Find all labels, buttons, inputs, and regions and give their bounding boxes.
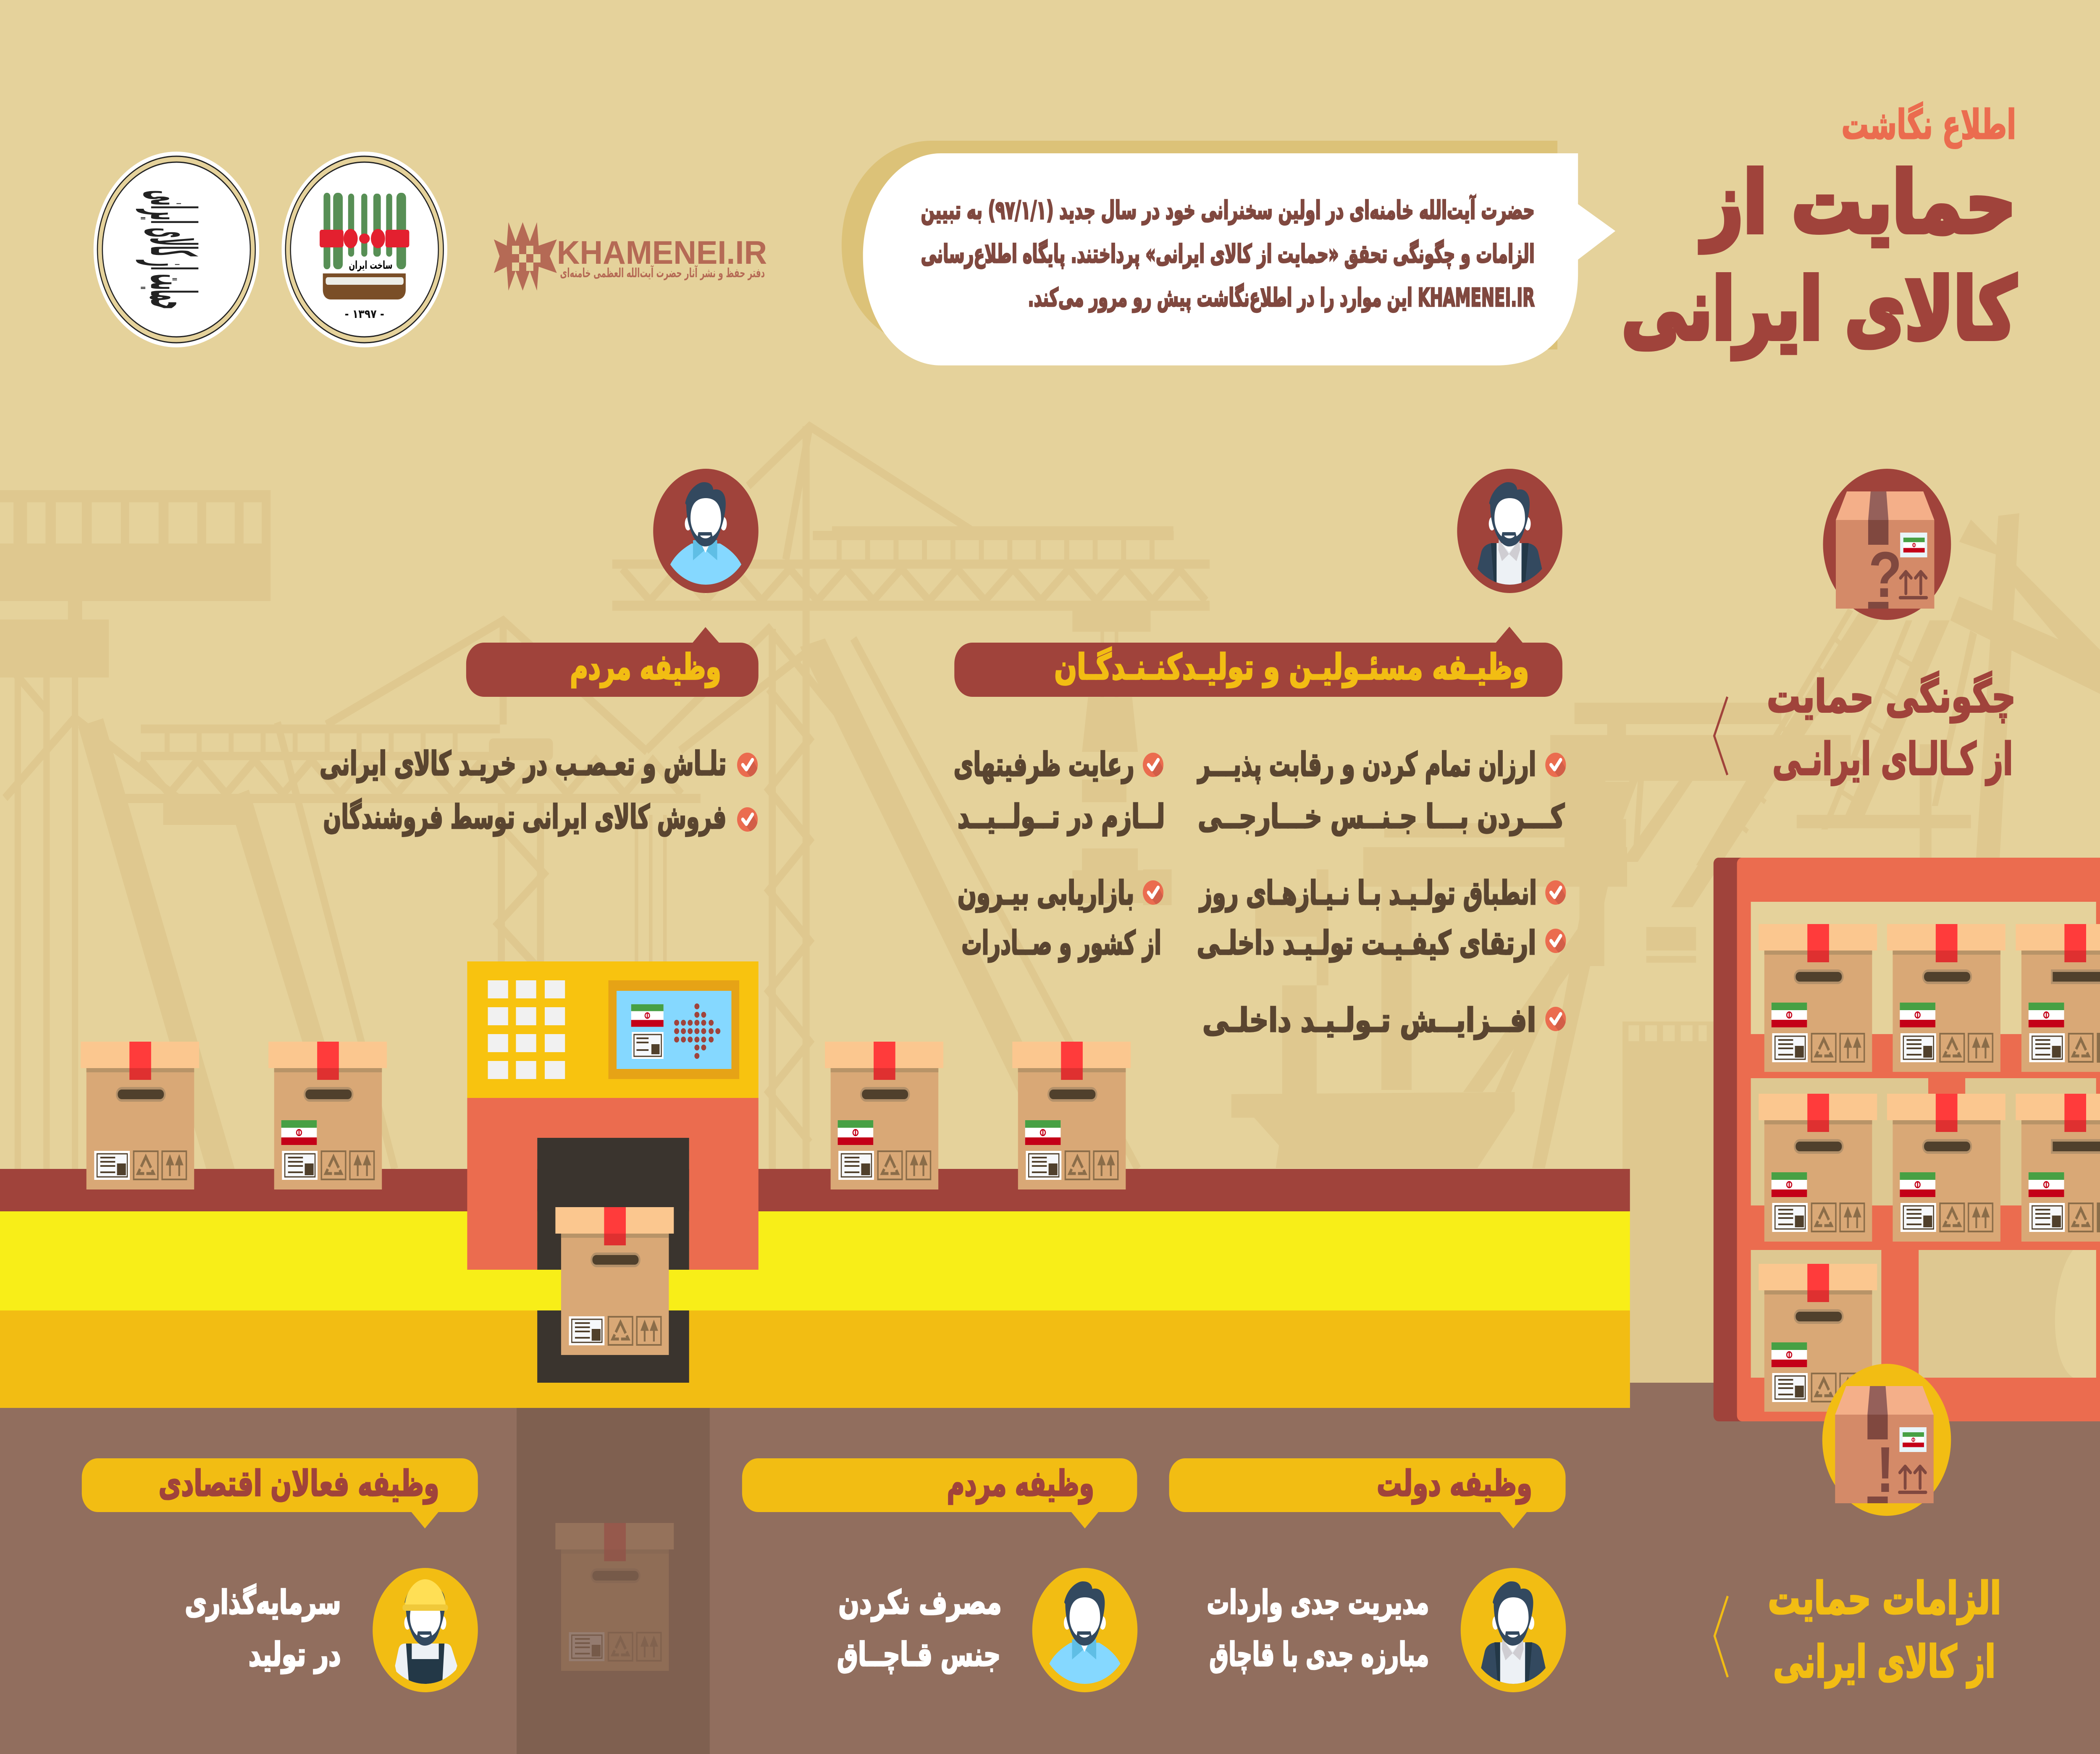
section heading: requirements: از کالای ایرانی [1773,1636,1995,1688]
package machine [467,961,759,1383]
darker floor strip [517,1408,710,1754]
logo: made in Iran 1397: ساخت ایران [349,259,393,271]
title block [1622,101,2016,360]
icon: box with question mark: ? [1869,539,1902,611]
text [185,1584,341,1674]
checklist right: کـــردن بـــا جـنــس خـــارجــی [1198,798,1565,836]
text: مبارزه جدی با قاچاق [1209,1636,1429,1674]
checklist right: ارتقای کیفـیـت تولـیـد داخلـی [1197,924,1536,962]
section heading: how to support [1767,671,2016,785]
section heading: requirements [1768,1573,2001,1688]
speech bubble backing [842,141,1557,349]
panel: government duties [1169,1458,1566,1692]
avatar: man in suit [1461,1568,1566,1692]
speech bubble [863,153,1615,365]
logo: made in Iran 1397: - ۱۳۹۷ - [345,307,384,321]
checklist right: انطباق تولـیـد بـا نـیـازهـای روز [1199,874,1537,912]
text: حمایت از کالای ایرانی [136,190,208,309]
panel: people duties, lower [742,1458,1137,1692]
heading pill: وظیفه مردم [947,1463,1094,1505]
checklist [320,745,758,836]
icon: box with exclamation [1822,1364,1951,1516]
speech bubble: حضرت آیت‌الله خامنه‌ای در اولین سخنرانی خود در سال جدید (۹۷/۱/۱) به تبیین [921,195,1535,225]
section heading: requirements: الزامات حمایت [1768,1573,2001,1625]
logo: hemayat az kalaye irani [94,152,259,347]
speech bubble: الزامات و چگونگی تحقق «حمایت از کالای ایرانی» پرداختند. پایگاه اطلاع‌رسانی [921,239,1535,269]
checklist middle: رعایت ظرفیتهای [954,746,1134,784]
text: مدیریت جدی واردات [1207,1584,1429,1622]
heading pill [954,627,1562,697]
text: جنس قـاچــاق [837,1636,1000,1674]
text [837,1584,1002,1674]
heading pill: وظیفه فعالان اقتصادی [159,1463,439,1505]
text: سرمایه‌گذاری [185,1584,341,1622]
section heading: how to support: چگونگی حمایت [1767,671,2016,723]
checklist right: ارزان تمام کردن و رقابت پذیـــر [1197,746,1536,784]
checklist middle: لــازم در تــولــیــد [958,798,1165,836]
section heading: how to support: از کـالـای ایرانـی [1772,734,2013,785]
heading pill [742,1458,1137,1528]
title block: حمایت از [1700,154,2016,252]
speech bubble: KHAMENEI.IR این موارد را در اطلاع‌نگاشت پیش رو مرور می‌کند. [1028,283,1535,312]
avatar: man in suit [1457,469,1562,593]
heading pill [1169,1458,1566,1528]
logo: KHAMENEI.IR: KHAMENEI.IR [557,235,767,271]
avatar: worker [373,1568,478,1692]
background: crane silhouettes [0,426,2100,1386]
icon: box with exclamation: ! [1876,1434,1894,1506]
arrow: chevron yellow [1714,1596,1728,1677]
panel: officials and producers duties [954,469,1566,1040]
faded box on floor strip [555,1523,674,1671]
checklist right [1197,746,1566,1040]
checklist middle: از کشور و صــادرات [961,924,1161,962]
heading pill: وظیفه مردم [570,647,721,688]
avatar: casual man [1032,1568,1137,1692]
text: در تولید [249,1636,341,1674]
checklist middle [954,746,1165,962]
avatar: casual man [653,469,759,593]
logo: KHAMENEI.IR [494,222,767,291]
text [1207,1584,1429,1674]
brown ground [0,1383,2100,1754]
checklist: فروش کالای ایرانی توسط فروشندگان [323,798,727,836]
arrow: chevron red [1714,697,1727,775]
checklist: تلـاش و تعـصـب در خریـد کالای ایرانی [320,745,727,783]
title block: اطلاع نگاشت [1842,101,2016,149]
checklist right: افــزایــش تـولـیـد داخلـی [1202,1002,1536,1040]
icon: box with question mark [1823,469,1951,620]
shelf with boxes [1714,858,2100,1421]
logo: KHAMENEI.IR: دفتر حفظ و نشر آثار حضرت آیت‌الله العظمی خامنه‌ای [560,265,765,281]
heading pill: وظیفه دولت [1377,1463,1532,1505]
conveyor belt [0,1169,1630,1408]
text: مصرف نکردن [838,1584,1002,1622]
heading pill [466,627,759,697]
heading pill [82,1458,478,1528]
checklist middle: بازاریابی بیـرون [958,874,1134,912]
heading pill: وظیـفه مسئـولیـن و تولیـدکنـنـدگـان [1054,647,1529,688]
panel: economic actors duties [82,1458,478,1692]
panel: people duties [320,469,759,836]
icon: star ornament [494,222,557,291]
title block: کالای ایرانی [1622,260,2016,360]
conveyor boxes [81,1042,1131,1355]
logo: made in Iran 1397 [282,152,447,347]
